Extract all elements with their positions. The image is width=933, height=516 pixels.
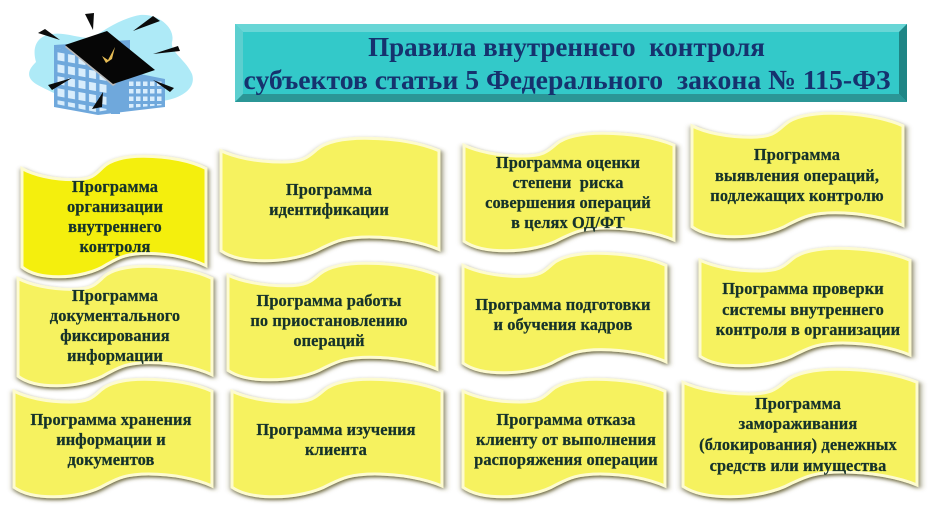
panel: program 1: контроля — [79, 237, 151, 256]
panel: program 7 — [463, 253, 666, 373]
panel: program 9: Программа хранения — [30, 410, 192, 429]
panel: program 9: документов — [67, 450, 155, 469]
icon background blob — [29, 15, 193, 104]
title text: субъектов статьи 5 Федерального закона № 115-ФЗ — [244, 64, 890, 95]
panel: program 11: распоряжения операции — [474, 450, 658, 469]
panel: program 10 — [232, 379, 442, 497]
panel: program 4 — [692, 113, 903, 237]
panel: program 6: по приостановлению — [250, 311, 408, 330]
panel: program 9: информации и — [56, 430, 166, 449]
panel: program 5: информации — [67, 346, 163, 365]
title banner — [235, 24, 907, 102]
panel: program 1: Программа — [72, 177, 158, 196]
panel: program 8: Программа проверки — [722, 279, 884, 298]
panel: program 9 — [14, 379, 212, 497]
panel: program 3: степени риска — [512, 173, 624, 192]
panel: program 11: клиенту от выполнения — [476, 430, 656, 449]
panel: program 8 — [700, 248, 910, 366]
panel: program 12: Программа — [755, 394, 841, 413]
panel: program 5: Программа — [72, 286, 158, 305]
panel: program 6: операций — [293, 331, 365, 350]
icon: black book — [65, 31, 155, 86]
panel: program 3: в целях ОД/ФТ — [511, 213, 625, 232]
panel: program 12: замораживания — [739, 414, 857, 433]
panel: program 12: (блокирования) денежных — [699, 435, 898, 454]
panel: program 3: Программа оценки — [496, 153, 641, 172]
panel: program 11: Программа отказа — [496, 410, 636, 429]
panel: program 3 — [464, 133, 674, 251]
panel: program 1: организации — [67, 197, 163, 216]
panel: program 4: Программа — [754, 145, 840, 164]
panel: program 5: фиксирования — [60, 326, 170, 345]
panel: program 7: и обучения кадров — [493, 315, 633, 334]
title text: Правила внутреннего контроля — [368, 32, 765, 62]
panel: program 3: совершения операций — [485, 193, 651, 212]
panel: program 6 — [228, 263, 437, 380]
panel: program 2 — [221, 138, 439, 261]
icon: office buildings — [54, 40, 165, 115]
panel: program 2: идентификации — [269, 200, 389, 219]
panel: program 4: выявления операций, — [715, 166, 879, 185]
icon: document on office building — [29, 13, 193, 115]
panel: program 11 — [463, 379, 665, 497]
panel: program 10: клиента — [305, 440, 367, 459]
panel: program 4: подлежащих контролю — [710, 186, 884, 205]
title text — [244, 32, 890, 95]
panel: program 12: средств или имущества — [710, 456, 886, 475]
panel: program 8: системы внутреннего — [722, 300, 884, 319]
panel: program 8: контроля в организации — [716, 320, 901, 339]
panel: program 7: Программа подготовки — [475, 295, 651, 314]
panel: program 1: внутреннего — [68, 217, 162, 236]
panel: program 10: Программа изучения — [256, 420, 416, 439]
panel: program 12 — [683, 369, 917, 497]
panel: program 1 — [22, 156, 206, 277]
panel: program 6: Программа работы — [256, 291, 402, 310]
panel: program 5: документального — [50, 306, 180, 325]
panel: program 2: Программа — [286, 180, 372, 199]
icon: rays — [38, 13, 180, 109]
panel: program 5 — [18, 266, 212, 386]
